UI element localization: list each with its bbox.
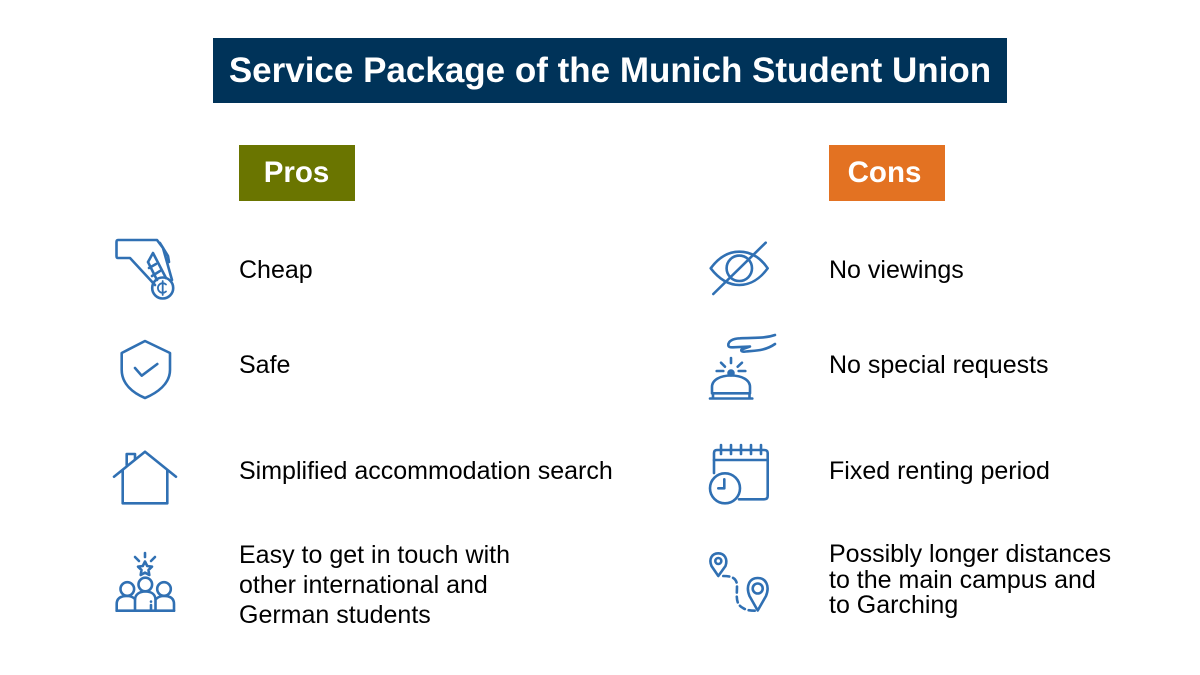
text: easy to get in touch: other international and <box>239 571 488 599</box>
title <box>213 38 1007 103</box>
text: no special requests: No special requests <box>829 351 1049 379</box>
icon: route with map pins <box>710 553 768 611</box>
heading: cons <box>829 145 945 201</box>
text: longer distances: to the main campus and <box>829 566 1096 594</box>
text: safe: Safe <box>239 351 290 379</box>
heading: cons: Cons <box>848 156 921 189</box>
text: simplified search: Simplified accommodation search <box>239 457 613 485</box>
icon: hand with coin <box>116 240 173 298</box>
icon: crossed-out eye <box>711 243 768 294</box>
text: longer distances <box>829 540 1111 619</box>
title: Service Package of the Munich Student Union <box>229 51 991 90</box>
heading: pros <box>239 145 355 201</box>
text: easy to get in touch: German students <box>239 601 431 629</box>
icon: calendar with clock <box>710 445 768 503</box>
text: longer distances: Possibly longer distances <box>829 540 1111 568</box>
text: fixed renting period: Fixed renting period <box>829 457 1050 485</box>
text: easy to get in touch: Easy to get in touch with <box>239 541 510 569</box>
icon: group of people with star <box>117 553 174 611</box>
heading: pros: Pros <box>264 156 329 189</box>
text: no viewings: No viewings <box>829 256 964 284</box>
icon: house <box>114 452 176 503</box>
icon: shield with check <box>122 341 170 398</box>
text: easy to get in touch <box>239 541 510 629</box>
icon: service bell with hand <box>710 335 775 398</box>
text: longer distances: to Garching <box>829 591 958 619</box>
text: cheap: Cheap <box>239 256 313 284</box>
